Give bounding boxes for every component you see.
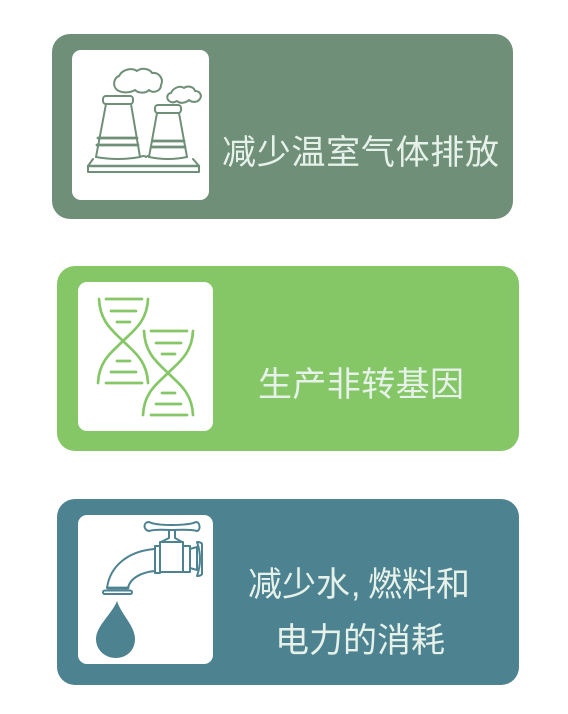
water drop <box>96 601 135 658</box>
icon card: DNA helixes <box>78 282 213 431</box>
heading: GMO production: 生产非转基因 <box>258 366 464 404</box>
icon card: factory cooling towers <box>72 50 209 200</box>
panel: GMO production <box>57 266 519 451</box>
text: reduce water, fuel: 燃料和 <box>368 566 470 604</box>
panel: water, fuel and electricity <box>57 499 519 685</box>
icon card: tap and water drop <box>78 515 213 664</box>
heading: reduce greenhouse gas: 减少温室气体排放 <box>222 134 499 172</box>
text: reduce water, fuel: 减少水, <box>248 566 360 604</box>
text: and electricity consumption: 电力的消耗 <box>275 622 445 660</box>
panel: greenhouse gas reduction <box>52 34 513 219</box>
